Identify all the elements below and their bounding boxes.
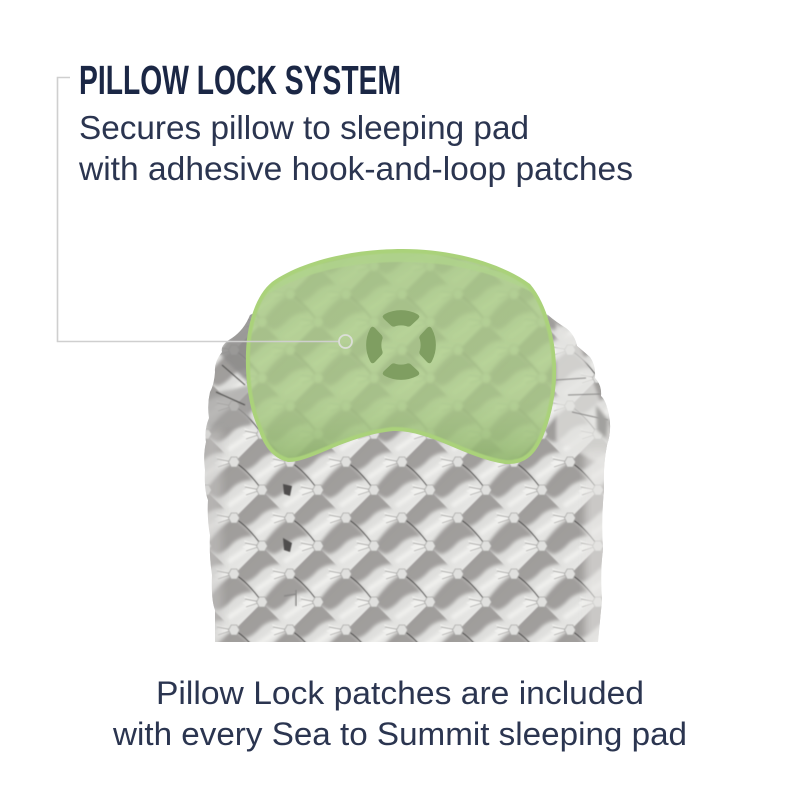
callout leader line: [58, 78, 352, 348]
right edge shading: [552, 319, 610, 642]
footer note: Pillow Lock patches are included: [156, 675, 644, 711]
pillow rim: [246, 249, 556, 464]
logo marks on pad: [283, 484, 296, 606]
description text: Secures pillow to sleeping pad: [79, 109, 529, 146]
footer note: [112, 675, 687, 752]
description text: with adhesive hook-and-loop patches: [78, 150, 633, 187]
footer note: with every Sea to Summit sleeping pad: [112, 716, 687, 752]
icon: pillow lock patches: [366, 310, 436, 380]
sleeping pad: [204, 314, 610, 642]
left edge shading: [204, 314, 252, 642]
title: PILLOW LOCK SYSTEM: [79, 57, 401, 103]
description text: [78, 109, 633, 187]
inflatable pillow: [240, 245, 560, 470]
pillow top band: [276, 253, 530, 291]
pillow quilting: [250, 257, 552, 458]
